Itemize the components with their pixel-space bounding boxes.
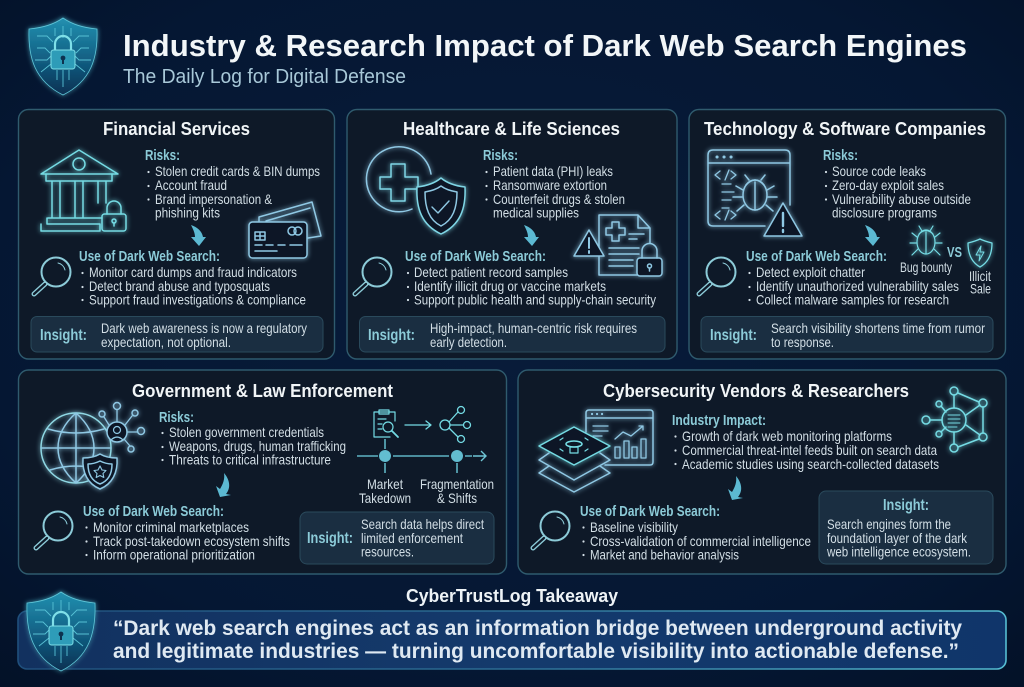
icon: globe with network and badge	[41, 402, 144, 489]
callout: insight: foundation layer of the dark	[827, 530, 968, 546]
callout: insight: limited enforcement	[361, 530, 463, 546]
callout: insight: Insight:	[883, 497, 929, 514]
callout: insight: expectation, not optional.	[101, 334, 231, 350]
text block: use of dark web search: Support fraud investigations & compliance	[89, 292, 306, 308]
text block: risks: Source code leaks	[832, 163, 926, 179]
text block: risks: Risks:	[145, 147, 180, 164]
text block: use of dark web search: Use of Dark Web Search:	[79, 248, 220, 265]
text block: use of dark web search: Identify illicit drug or vaccine markets	[414, 278, 606, 294]
arrow	[865, 225, 880, 246]
text block: use of dark web search: Track post-takedown ecosystem shifts	[93, 533, 290, 549]
text block: use of dark web search: Detect brand abuse and typosquats	[89, 278, 270, 294]
text block: risks: Brand impersonation &	[155, 191, 273, 207]
callout: insight: resources.	[361, 544, 414, 560]
panel: healthcare and life sciences	[347, 110, 677, 359]
callout: insight	[819, 491, 993, 564]
icon: layered data and dashboard	[539, 410, 653, 492]
callout: insight: Insight:	[307, 530, 353, 547]
text block: use of dark web search: Inform operational prioritization	[93, 546, 255, 562]
panel: cybersecurity vendors and researchers	[518, 370, 1006, 574]
text block: risks: Stolen government credentials	[169, 424, 324, 440]
text block: use of dark web search: Monitor card dumps and fraud indicators	[89, 264, 297, 280]
callout: insight	[701, 316, 993, 352]
text block: use of dark web search: Use of Dark Web Search:	[405, 248, 546, 265]
heading: cybersecurity: Cybersecurity Vendors & Researchers	[603, 381, 909, 401]
callout: insight	[360, 316, 665, 352]
heading: healthcare: Healthcare & Life Sciences	[403, 119, 620, 139]
icon: threat intelligence network	[922, 387, 987, 452]
text block: use of dark web search: Cross-validation of commercial intelligence	[590, 533, 811, 549]
label: vs: VS	[947, 244, 962, 261]
icon: credit cards	[249, 202, 321, 258]
text block: risks: Stolen credit cards & BIN dumps	[155, 163, 320, 179]
callout: insight	[31, 316, 323, 352]
text block: risks: medical supplies	[493, 204, 579, 220]
text block: use of dark web search: Market and behavior analysis	[590, 546, 739, 562]
text block: use of dark web search	[580, 503, 811, 562]
callout: insight: Search data helps direct	[361, 516, 484, 532]
chart: takedown timeline: Fragmentation	[420, 476, 494, 492]
callout: insight: High-impact, human-centric risk requires	[430, 320, 637, 336]
text block: use of dark web search	[83, 503, 290, 562]
panel: takeaway quote	[18, 611, 1006, 669]
heading: government: Government & Law Enforcement	[132, 381, 393, 401]
quote text: and legitimate industries — turning uncomfortable visibility into actionable defense.”	[113, 640, 959, 663]
callout: insight: Search visibility shortens time from rumor	[771, 320, 985, 336]
callout: insight: early detection.	[430, 334, 507, 350]
text block: use of dark web search	[746, 248, 959, 308]
text block: risks: phishing kits	[155, 204, 220, 220]
text block: risks: Account fraud	[155, 177, 227, 193]
chart: takedown timeline: Market	[367, 476, 403, 492]
arrow	[524, 225, 539, 246]
text block: use of dark web search: Use of Dark Web Search:	[746, 248, 887, 265]
text block: risks	[145, 147, 320, 220]
arrow	[728, 476, 743, 500]
icon: document search to branching network	[374, 406, 470, 442]
text block: industry impact	[672, 412, 939, 472]
text block: use of dark web search: Use of Dark Web Search:	[580, 503, 720, 520]
heading: financial services: Financial Services	[103, 119, 250, 139]
icon: magnifier	[699, 258, 736, 294]
panel: technology and software	[689, 110, 1006, 359]
icon: magnifier	[34, 258, 70, 294]
callout: insight: to response.	[771, 334, 834, 350]
text block: risks: Ransomware extortion	[493, 177, 607, 193]
callout: insight: Insight:	[40, 327, 87, 344]
text block: use of dark web search: Collect malware samples for research	[756, 292, 949, 308]
callout: insight: Insight:	[710, 327, 757, 344]
text block: risks	[823, 147, 971, 220]
text block: risks: Threats to critical infrastructure	[169, 452, 331, 468]
label: illicit sale: Illicit	[969, 268, 991, 284]
panel: financial services	[18, 110, 334, 359]
text block: use of dark web search: Baseline visibility	[590, 519, 678, 535]
text block: use of dark web search: Detect patient record samples	[414, 264, 568, 280]
label: bug bounty: Bug bounty	[900, 259, 952, 275]
text block: use of dark web search	[405, 248, 656, 308]
icon: medical document, warning, lock	[574, 215, 662, 276]
text block: risks: Risks:	[483, 147, 518, 164]
callout: insight: Search engines form the	[827, 516, 951, 532]
text block: industry impact: Commercial threat-intel feeds built on search data	[682, 442, 937, 458]
label: illicit sale: Sale	[970, 280, 991, 296]
text block: risks: Risks:	[823, 147, 858, 164]
text block: use of dark web search: Use of Dark Web Search:	[83, 503, 224, 520]
text block: use of dark web search: Support public health and supply-chain security	[414, 292, 656, 308]
icon: magnifier	[36, 512, 72, 548]
heading: takeaway: CyberTrustLog Takeaway	[406, 586, 618, 606]
callout: insight: Insight:	[368, 327, 415, 344]
label: illicit sale	[969, 268, 991, 296]
icon: magnifier	[533, 512, 570, 548]
icon: small shield with bolt	[968, 239, 992, 267]
chart: takedown timeline: Takedown	[359, 490, 411, 506]
text block: risks: Risks:	[159, 409, 194, 426]
text block: risks	[483, 147, 625, 220]
logo: circuit shield overlapping takeaway bar	[27, 592, 95, 671]
icon: small bug	[910, 226, 942, 255]
chart: takedown timeline	[357, 439, 494, 506]
text block: risks: disclosure programs	[832, 204, 937, 220]
text block: risks: Patient data (PHI) leaks	[493, 163, 613, 179]
text block: risks: Zero-day exploit sales	[832, 177, 944, 193]
arrow	[191, 225, 206, 246]
callout: insight	[300, 512, 494, 564]
quote text	[113, 617, 962, 663]
subtitle: The Daily Log for Digital Defense	[123, 66, 406, 88]
text block: industry impact: Academic studies using search-collected datasets	[682, 456, 939, 472]
logo: circuit shield with padlock	[29, 18, 97, 95]
text block: risks: Counterfeit drugs & stolen	[493, 191, 625, 207]
text block: risks	[159, 409, 346, 468]
chart: takedown timeline: & Shifts	[437, 490, 477, 506]
quote text: “Dark web search engines act as an information bridge between underground activity	[113, 617, 962, 640]
text block: use of dark web search: Monitor criminal marketplaces	[93, 519, 249, 535]
text block: industry impact: Industry Impact:	[672, 412, 766, 429]
arrow	[216, 473, 231, 497]
icon: magnifier	[355, 258, 392, 294]
icon: medical cross and shield	[366, 147, 465, 234]
callout: insight: web intelligence ecosystem.	[826, 544, 971, 560]
panel: government and law enforcement	[18, 370, 506, 574]
text block: industry impact: Growth of dark web monitoring platforms	[682, 428, 892, 444]
text block: risks: Weapons, drugs, human trafficking	[169, 438, 346, 454]
icon: code window with bug and warning	[708, 150, 802, 236]
text block: use of dark web search	[79, 248, 306, 308]
icon: bank with padlock	[41, 150, 126, 231]
text block: use of dark web search: Identify unauthorized vulnerability sales	[756, 278, 959, 294]
text block: use of dark web search: Detect exploit chatter	[756, 264, 865, 280]
text block: risks: Vulnerability abuse outside	[832, 191, 971, 207]
title: Industry & Research Impact of Dark Web Search Engines	[123, 28, 967, 63]
heading: technology: Technology & Software Companies	[704, 119, 986, 139]
callout: insight: Dark web awareness is now a regulatory	[101, 320, 307, 336]
